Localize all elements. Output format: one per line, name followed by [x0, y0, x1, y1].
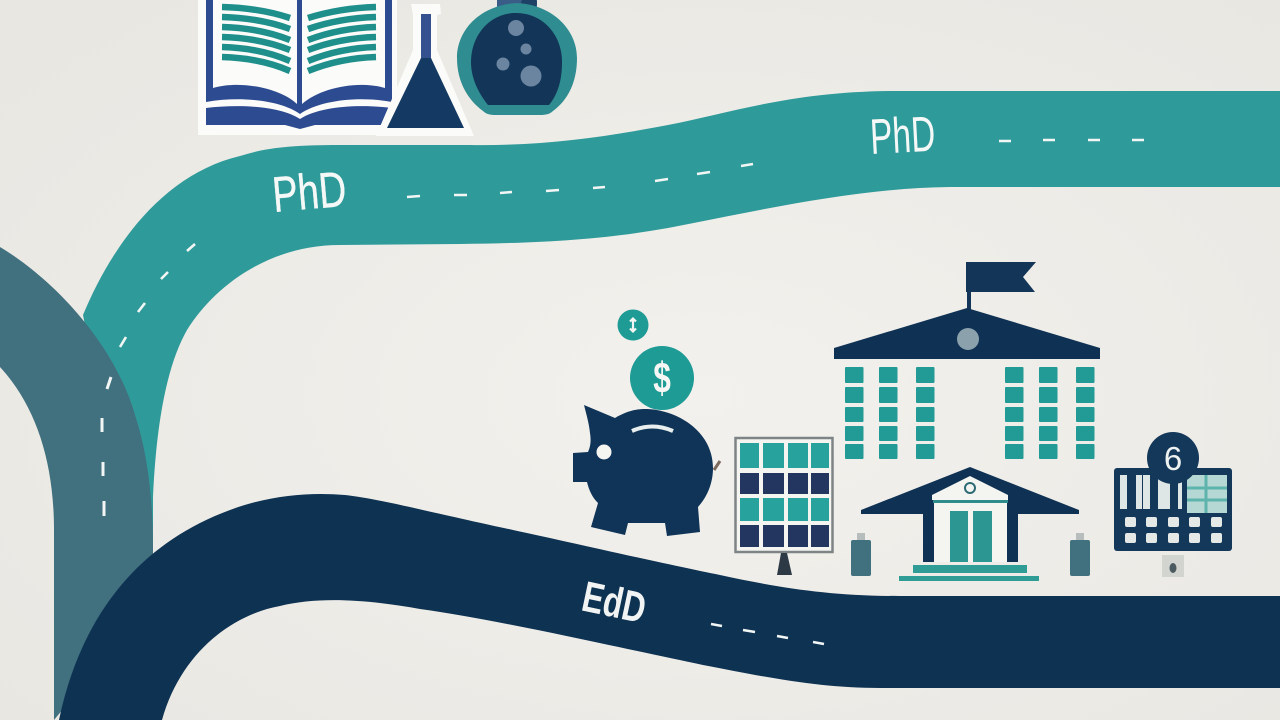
- icon: piggy bank with coins: [573, 310, 720, 536]
- icon: bank entrance: [861, 467, 1079, 581]
- road dashes: PhD path: [120, 140, 1144, 347]
- label: EdD: EdD: [578, 573, 650, 633]
- dollar coin: $: [653, 354, 671, 403]
- icon: solar panel board: [736, 438, 832, 575]
- roof: [834, 308, 1100, 359]
- icon: open book: [198, 0, 397, 135]
- road: EdD navy path: [59, 494, 1280, 720]
- icon: payment terminal: [1114, 432, 1232, 577]
- road: slate shared path: [0, 247, 153, 720]
- icon: conical flask: [376, 4, 474, 136]
- pig body: [573, 405, 713, 536]
- icon: university building with flag: [834, 262, 1100, 459]
- road dashes: EdD path: [711, 624, 824, 644]
- label: PhD lower: PhD: [270, 162, 349, 223]
- small coin: [618, 310, 648, 340]
- icon: round-bottom flask: [457, 0, 577, 115]
- icon: left lamp post: [851, 533, 871, 576]
- road dashes: slate path: [102, 377, 111, 516]
- road: PhD teal path: [83, 91, 1280, 553]
- label: PhD upper: PhD: [869, 106, 937, 166]
- flag: [966, 262, 1036, 310]
- icon: right lamp post: [1070, 533, 1090, 576]
- icon: payment terminal: 6: [1164, 440, 1182, 477]
- columns: [845, 367, 1094, 459]
- dollar coin: [630, 346, 694, 410]
